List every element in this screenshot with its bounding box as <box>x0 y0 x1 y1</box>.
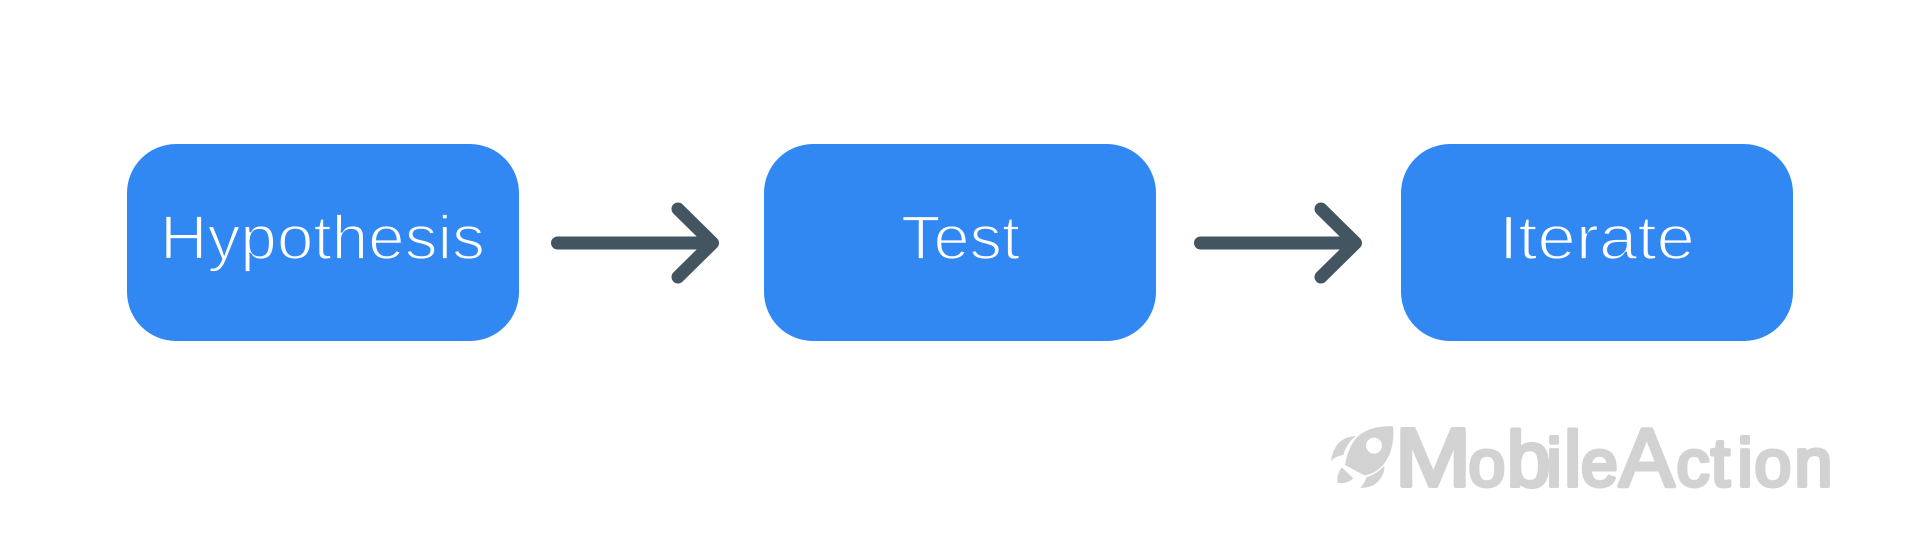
arrow: test to iterate <box>1200 209 1356 277</box>
logo wordmark: M <box>1395 412 1471 504</box>
logo wordmark: e <box>1581 426 1618 500</box>
heading: Iterate: Iterate <box>1499 204 1695 273</box>
panel: iterate step <box>1401 144 1793 341</box>
logo wordmark: c <box>1676 426 1710 500</box>
logo wordmark: o <box>1468 426 1505 500</box>
logo wordmark: i <box>1546 425 1562 501</box>
logo wordmark: l <box>1564 415 1581 503</box>
arrow: hypothesis to test <box>558 209 712 277</box>
heading: Test: Test <box>901 204 1020 273</box>
panel: hypothesis step <box>127 144 519 341</box>
logo wordmark <box>1395 411 1832 504</box>
logo: MobileAction <box>1331 411 1832 504</box>
logo wordmark: i <box>1738 425 1753 501</box>
logo wordmark: b <box>1507 415 1550 503</box>
logo wordmark: A <box>1619 411 1675 504</box>
panel: test step <box>764 144 1156 341</box>
logo wordmark: n <box>1794 425 1832 501</box>
icon: rocket <box>1331 426 1393 488</box>
heading: Hypothesis: Hypothesis <box>160 204 485 273</box>
logo wordmark: o <box>1754 426 1791 500</box>
logo wordmark: t <box>1711 425 1730 501</box>
